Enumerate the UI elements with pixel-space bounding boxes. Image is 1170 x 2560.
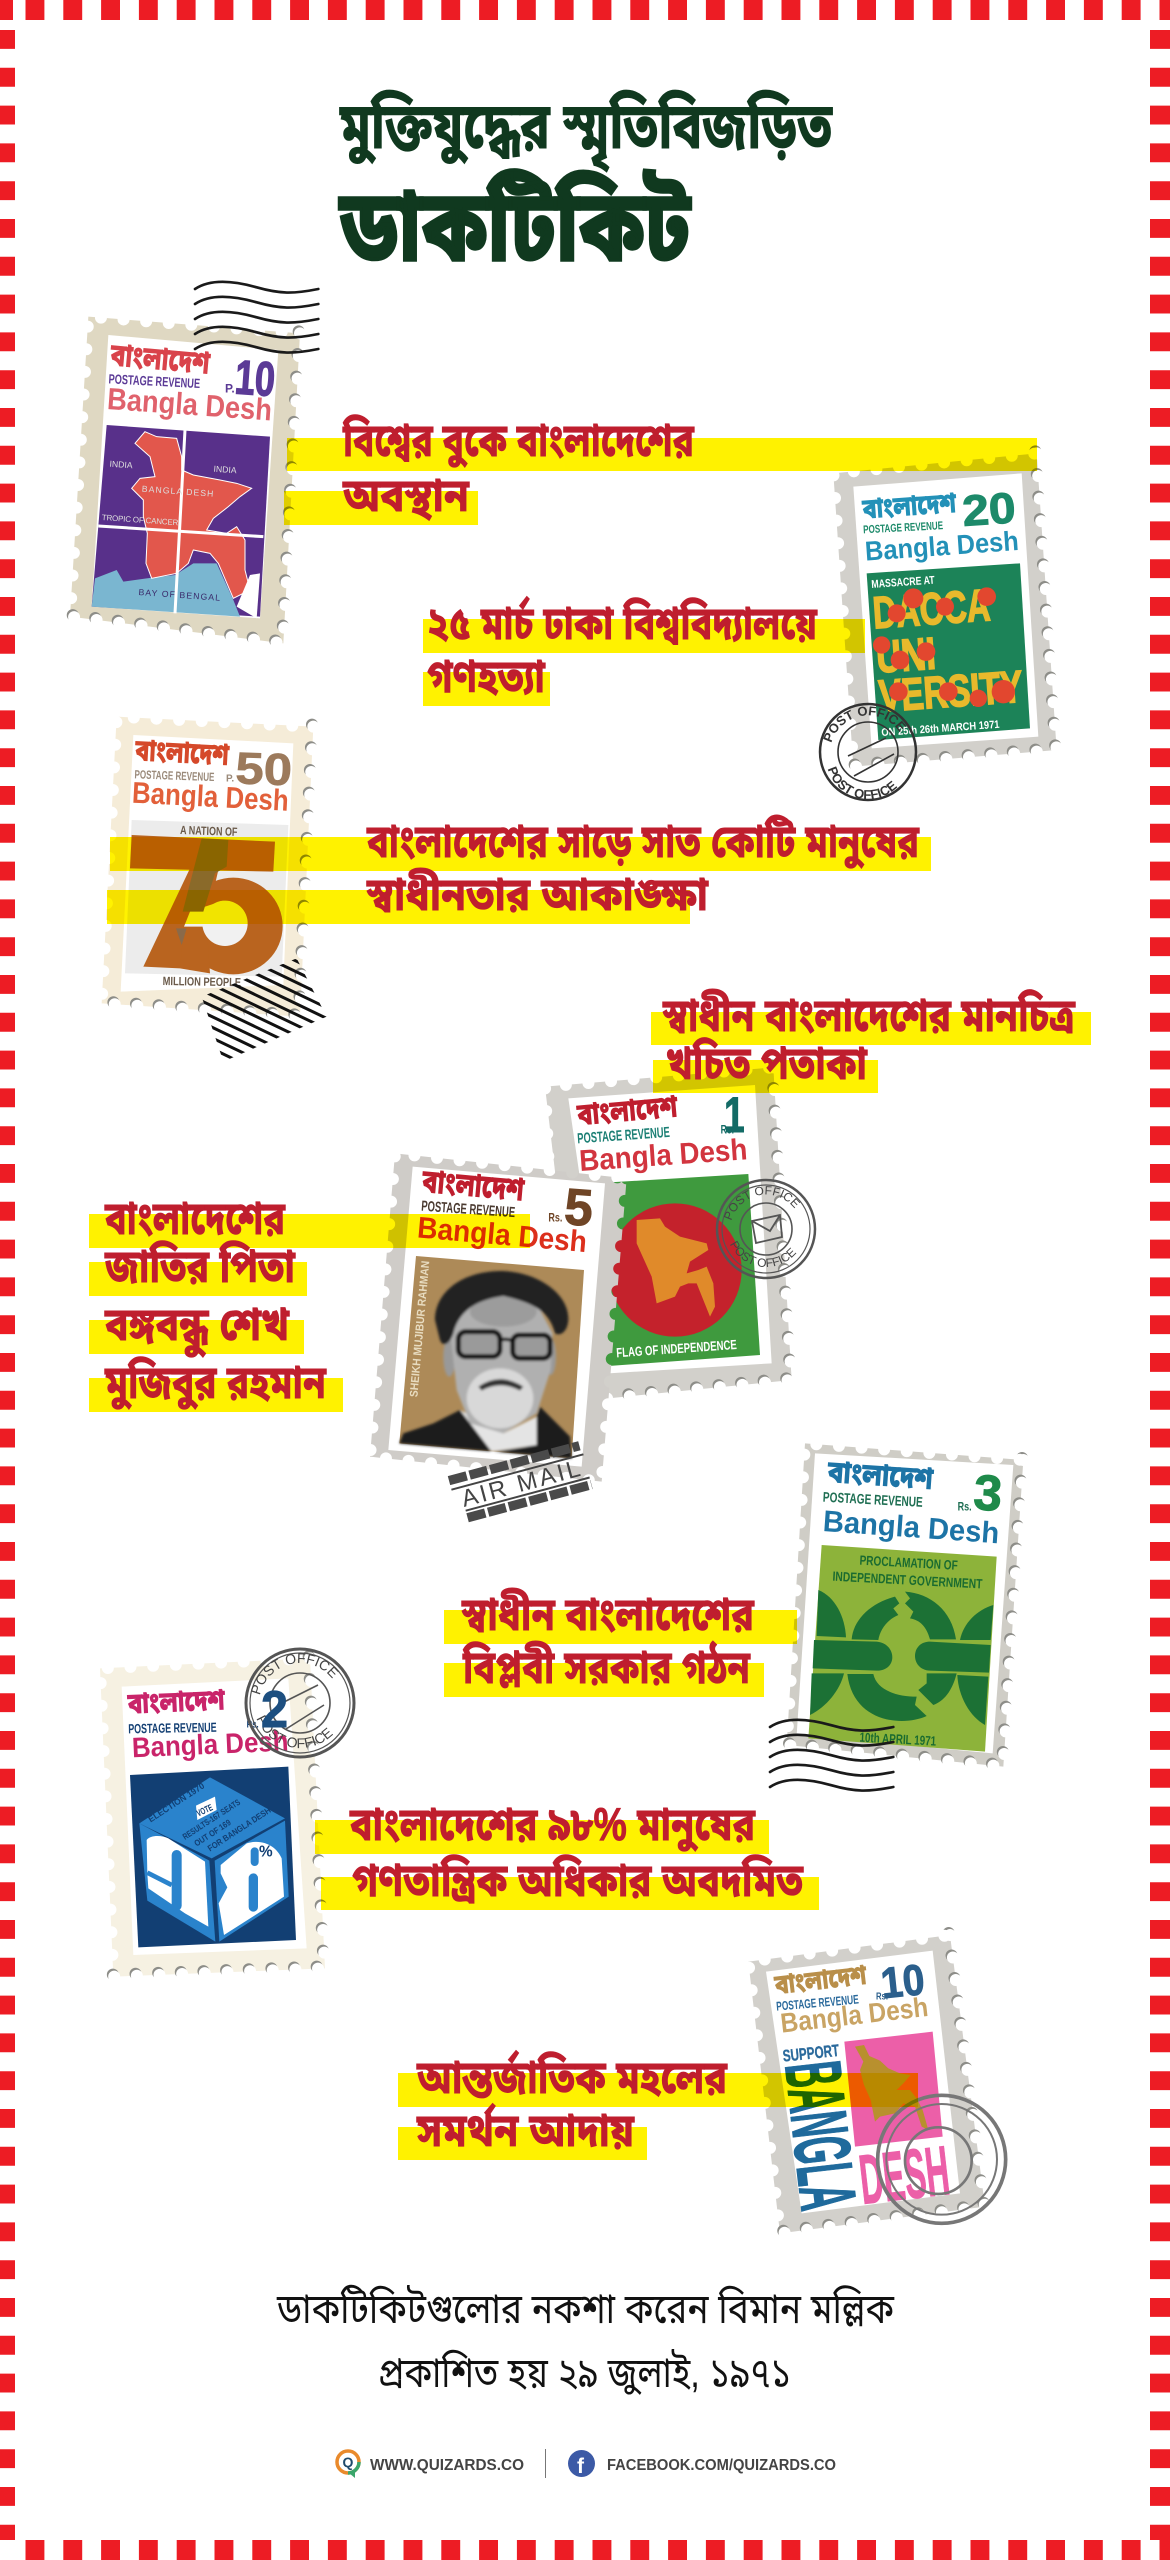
stamp: map of Bangladesh 10p: INDIA [213, 464, 237, 475]
designer credit: প্রকাশিত হয় ২৯ জুলাই, ১৯৭১ [378, 2349, 791, 2396]
caption: international support: আন্তর্জাতিক মহলের [416, 2050, 728, 2103]
stamp: Sheikh Mujibur Rahman 5 Rs: POSTAGE REVENUE [421, 1199, 516, 1221]
caption: 75 million people: বাংলাদেশের সাড়ে সাত কোটি মানুষের [366, 815, 920, 869]
stamp: Sheikh Mujibur Rahman 5 Rs [370, 1153, 627, 1482]
stamp: massacre at Dacca University 20p: MASSACRE AT [871, 575, 935, 591]
stamp: election 1970 98 percent 2 Rs: Rs. [247, 1719, 259, 1730]
postmark on 1 Re stamp: POST OFFICE [724, 1186, 800, 1220]
stamp: proclamation of independent government 3 Rs: PROCLAMATION OF [859, 1553, 958, 1573]
stamp: nation of 75 million people 50p: 50 [235, 742, 293, 795]
stamp: flag of independence 1 Re: POSTAGE REVENUE [577, 1125, 671, 1147]
stamp: election 1970 98 percent 2 Rs [100, 1656, 325, 1977]
stamp: proclamation of independent government 3 Rs: 3 [972, 1464, 1004, 1522]
stamp: support Bangla Desh 10 Rs: POSTAGE REVENUE [776, 1993, 859, 2014]
stamp: map of Bangladesh 10p: বাংলাদেশ [109, 338, 212, 381]
footer links [337, 2449, 836, 2478]
stamp: support Bangla Desh 10 Rs: 10 [879, 1956, 927, 2008]
icon: facebook [568, 2450, 595, 2478]
stamp: map of Bangladesh 10p [69, 317, 300, 643]
hatched cancel mark on 50p stamp [202, 959, 326, 1059]
stamp: nation of 75 million people 50p: P. [226, 774, 234, 785]
postmark on 2 Rs stamp: POST OFFICE [256, 1715, 333, 1748]
facebook address: FACEBOOK.COM/QUIZARDS.CO [607, 2457, 836, 2474]
stamp: election 1970 98 percent 2 Rs: VOTE [195, 1802, 214, 1818]
postmark on 20p stamp [818, 702, 918, 802]
stamp: map of Bangladesh 10p: 10 [233, 350, 277, 407]
stamp: massacre at Dacca University 20p: VERSITY [877, 661, 1024, 722]
value 2: 2 [261, 1681, 288, 1739]
stamp: proclamation of independent government 3 Rs: POSTAGE REVENUE [823, 1489, 923, 1510]
stamp: flag of independence 1 Re: Bangla Desh [578, 1133, 748, 1178]
caption: revolutionary government [461, 1588, 755, 1693]
icon: quizards logo: Q [342, 2454, 354, 2470]
stamp: proclamation of independent government 3 Rs: INDEPENDENT GOVERNMENT [832, 1569, 983, 1592]
stamp: map of Bangladesh 10p: BAY OF BENGAL [138, 587, 221, 603]
stamp: election 1970 98 percent 2 Rs: বাংলাদেশ [126, 1684, 226, 1720]
postmark on 1 Re stamp: POST OFFICE [730, 1240, 796, 1267]
stamp: map of Bangladesh 10p: INDIA [109, 459, 133, 470]
stamp: map of Bangladesh 10p: POSTAGE REVENUE [108, 371, 201, 391]
stamp: support Bangla Desh 10 Rs: Rs. [876, 1991, 888, 2002]
stamp: election 1970 98 percent 2 Rs: FOR BANGLA DESH [206, 1805, 273, 1853]
stamp: nation of 75 million people 50p: বাংলাদেশ [134, 734, 230, 772]
stamp: flag of independence 1 Re: Re. [721, 1122, 734, 1136]
stamp: election 1970 98 percent 2 Rs: % [259, 1844, 273, 1861]
stamp: massacre at Dacca University 20p: 20 [961, 484, 1017, 536]
caption: 75 million people: স্বাধীনতার আকাঙ্ক্ষা [366, 868, 709, 920]
stamp: election 1970 98 percent 2 Rs: Bangla Desh [131, 1726, 289, 1764]
stamp: support Bangla Desh 10 Rs: SUPPORT [782, 2041, 840, 2066]
postmark on 20p stamp: POST OFFICE [823, 706, 906, 742]
stamp: flag of independence 1 Re [545, 1065, 792, 1403]
title [339, 88, 833, 281]
cancel waves on 3 Rs stamp [770, 1720, 893, 1791]
icon: facebook: f [577, 2455, 585, 2478]
caption: father of the nation: বাংলাদেশের [104, 1192, 286, 1244]
caption: father of the nation: বঙ্গবন্ধু শেখ [104, 1298, 290, 1358]
cancel waves on map stamp [195, 282, 318, 353]
caption: revolutionary government: বিপ্লবী সরকার গঠন [462, 1641, 751, 1693]
postmark on 10 Rs stamp [878, 2095, 1006, 2223]
stamp: election 1970 98 percent 2 Rs: ELECTION 1970 [146, 1780, 206, 1824]
stamp: Sheikh Mujibur Rahman 5 Rs: Bangla Desh [416, 1211, 588, 1259]
caption: international support: সমর্থন আদায় [416, 2103, 635, 2156]
caption: father of the nation [104, 1192, 327, 1410]
stamp: election 1970 98 percent 2 Rs: POSTAGE REVENUE [128, 1720, 217, 1736]
stamp: massacre at Dacca University 20p: Bangla Desh [864, 525, 1020, 567]
stamp: map of Bangladesh 10p: TROPIC OF CANCER [102, 513, 179, 527]
caption: Dhaka University massacre: ২৫ মার্চ ঢাকা বিশ্ববিদ্যালয়ে [427, 596, 818, 649]
stamp: flag of independence 1 Re: 1 [724, 1087, 745, 1143]
stamp: nation of 75 million people 50p: MILLION PEOPLE [163, 974, 241, 989]
postmark on 20p stamp: POST OFFICE [828, 766, 898, 799]
caption: father of the nation: জাতির পিতা [104, 1240, 296, 1292]
postmark on 2 Rs stamp: POST OFFICE [250, 1653, 338, 1694]
stamp: flag of independence 1 Re: বাংলাদেশ [575, 1090, 679, 1132]
designer credit [276, 2285, 895, 2396]
postmark on 1 Re stamp [716, 1178, 816, 1280]
stamp: nation of 75 million people 50p [100, 717, 313, 1017]
caption: 98 percent democratic rights [349, 1798, 804, 1906]
caption: 98 percent democratic rights: গণতান্ত্রিক অধিকার অবদমিত [352, 1854, 804, 1906]
stamp: massacre at Dacca University 20p: ON 25th 26th MARCH 1971 [881, 719, 1000, 739]
caption: flag with map: খচিত পতাকা [666, 1037, 868, 1089]
stamp: Sheikh Mujibur Rahman 5 Rs: বাংলাদেশ [420, 1163, 526, 1208]
stamp: flag of independence 1 Re: FLAG OF INDEPENDENCE [616, 1337, 737, 1360]
stamp: proclamation of independent government 3 Rs [785, 1443, 1023, 1767]
caption: 75 million people [366, 815, 920, 920]
postmark on 2 Rs stamp [244, 1648, 356, 1758]
stamp: proclamation of independent government 3 Rs: বাংলাদেশ [826, 1456, 935, 1496]
caption: flag with map: স্বাধীন বাংলাদেশের মানচিত্র [662, 989, 1076, 1041]
stamp: nation of 75 million people 50p: A NATION OF [180, 823, 238, 839]
caption: father of the nation: মুজিবুর রহমান [104, 1356, 327, 1410]
stamp: proclamation of independent government 3 Rs: 10th APRIL 1971 [859, 1730, 937, 1749]
caption: revolutionary government: স্বাধীন বাংলাদেশের [461, 1588, 755, 1640]
stamp: Sheikh Mujibur Rahman 5 Rs: 5 [563, 1177, 595, 1237]
caption: Dhaka University massacre: গণহত্যা [427, 650, 546, 702]
stamp: massacre at Dacca University 20p [833, 451, 1057, 767]
stamp: map of Bangladesh 10p: BANGLA DESH [142, 484, 214, 499]
highlight bars [89, 438, 1091, 2160]
stamp: map of Bangladesh 10p: P. [225, 381, 235, 395]
stamp: massacre at Dacca University 20p: POSTAGE REVENUE [863, 520, 944, 536]
caption: position on world map: বিশ্বের বুকে বাংলাদেশের [342, 414, 695, 468]
stamp: massacre at Dacca University 20p: বাংলাদেশ [861, 487, 957, 524]
designer credit: ডাকটিকিটগুলোর নকশা করেন বিমান মল্লিক [276, 2285, 895, 2332]
stamp: Sheikh Mujibur Rahman 5 Rs: SHEIKH MUJIBUR RAHMAN [408, 1260, 432, 1398]
caption: international support [416, 2050, 728, 2156]
stamp: support Bangla Desh 10 Rs [748, 1933, 985, 2233]
portrait [399, 1271, 572, 1458]
stamp: massacre at Dacca University 20p: DACCA [871, 579, 992, 638]
title: ডাকটিকিট [339, 170, 691, 281]
caption: position on world map: অবস্থান [342, 469, 470, 521]
air mail cancel: AIR MAIL [459, 1455, 583, 1513]
stamp: Sheikh Mujibur Rahman 5 Rs: Rs. [548, 1211, 562, 1225]
caption: position on world map [342, 414, 695, 521]
stamp: nation of 75 million people 50p: Bangla Desh [131, 777, 289, 818]
website: WWW.QUIZARDS.CO [370, 2457, 524, 2474]
stamp: support Bangla Desh 10 Rs: Bangla Desh [779, 1991, 930, 2039]
stamp: massacre at Dacca University 20p: UNI [874, 628, 937, 683]
stamp: map of Bangladesh 10p: Bangla Desh [106, 382, 273, 427]
air mail cancel [449, 1445, 592, 1520]
title: মুক্তিযুদ্ধের স্মৃতিবিজড়িত [339, 88, 833, 173]
caption: flag with map [662, 989, 1076, 1089]
stamp: election 1970 98 percent 2 Rs: OUT OF 169 [192, 1817, 233, 1848]
stamp: proclamation of independent government 3 Rs: Rs. [958, 1500, 972, 1514]
stamp: nation of 75 million people 50p: POSTAGE REVENUE [134, 767, 215, 784]
stamp: proclamation of independent government 3 Rs: Bangla Desh [822, 1505, 1000, 1550]
stamp: support Bangla Desh 10 Rs: DESH [856, 2131, 953, 2219]
caption: 98 percent democratic rights: বাংলাদেশের ৯৮% মানুষের [349, 1798, 756, 1852]
icon: quizards logo [337, 2451, 359, 2478]
stamp: support Bangla Desh 10 Rs: BANGLA [768, 2057, 873, 2214]
caption: Dhaka University massacre [427, 596, 818, 702]
stamp: election 1970 98 percent 2 Rs: RESULTS-167 SEATS [181, 1797, 242, 1842]
stamp: support Bangla Desh 10 Rs: বাংলাদেশ [772, 1960, 869, 2000]
